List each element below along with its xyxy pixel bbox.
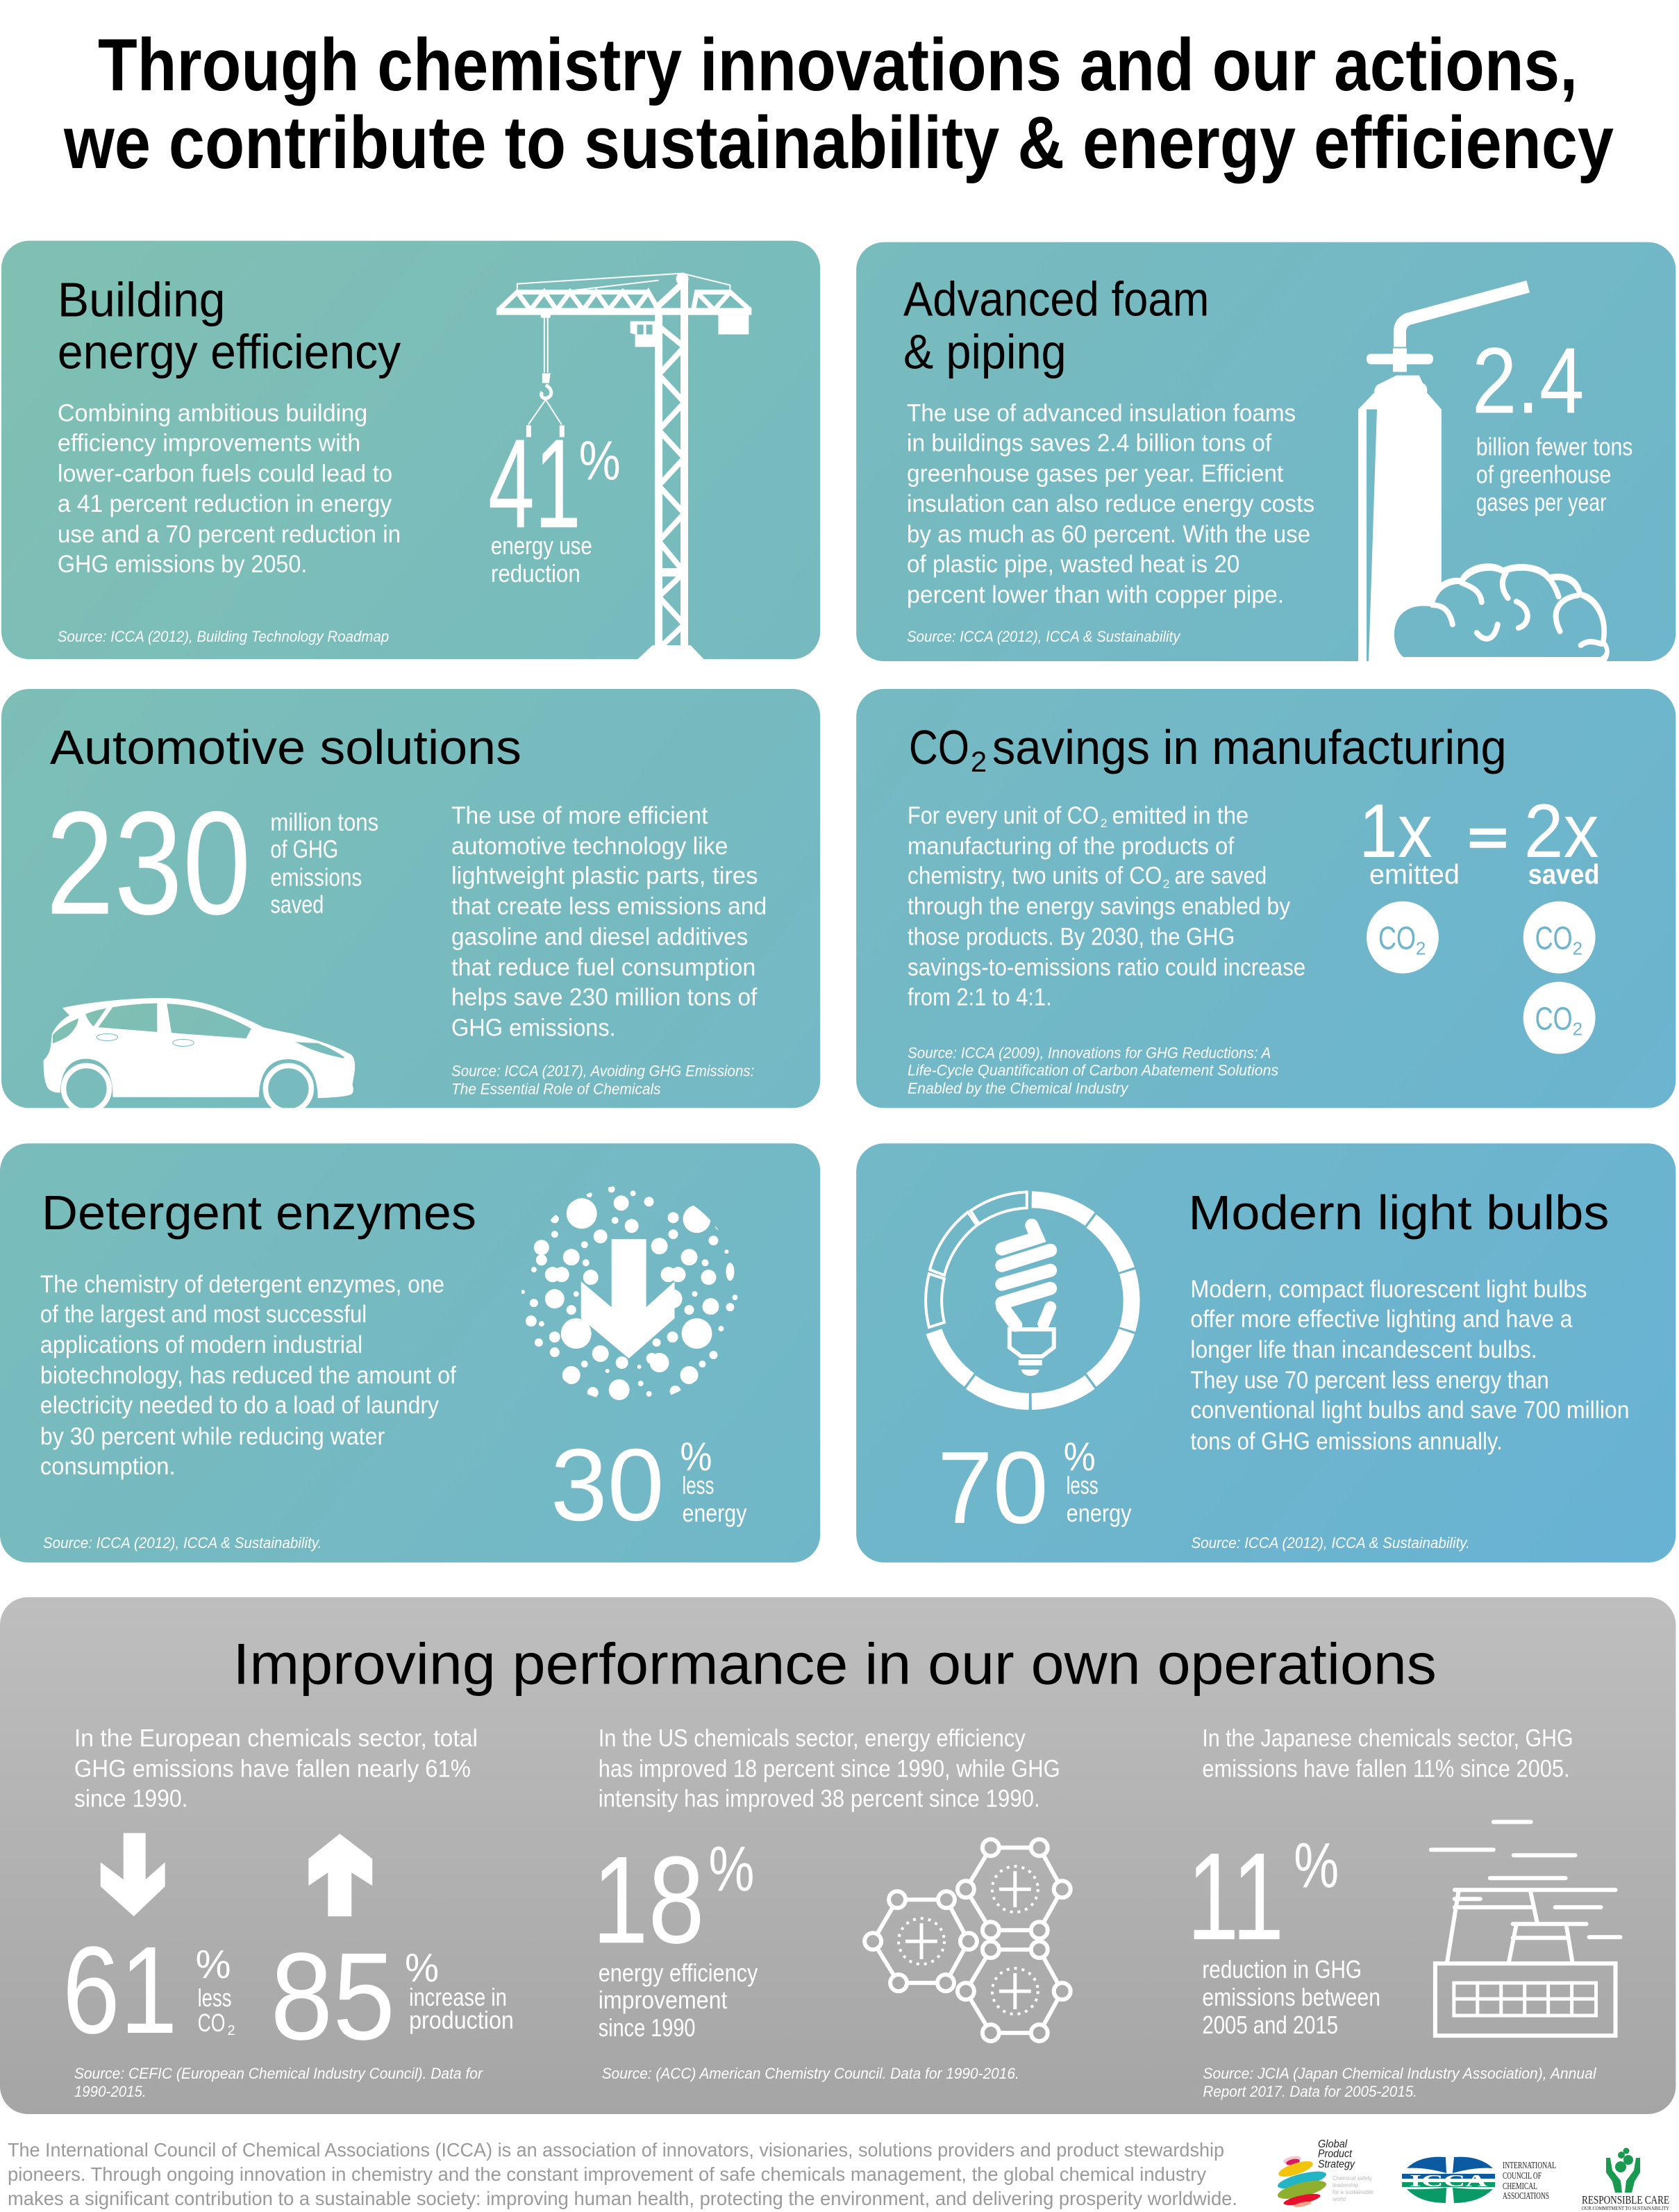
source	[908, 1044, 1278, 1097]
panel: automotive solutions	[1, 689, 820, 1111]
body text: by 30 percent while reducing water	[40, 1423, 385, 1450]
icon: CO2 circle saved 1	[1523, 901, 1596, 974]
stat: 11 percent reduction: %	[1294, 1830, 1339, 1901]
source: JCIA: Source: JCIA (Japan Chemical Industry Association), Annual	[1203, 2065, 1597, 2082]
stat: 70 percent less energy: %	[1064, 1435, 1096, 1479]
source: JCIA: Report 2017. Data for 2005-2015.	[1203, 2083, 1417, 2100]
icon: CO2 circle saved 1: CO	[1535, 920, 1573, 956]
stat: 18 percent energy efficiency: improvement	[599, 1986, 727, 2014]
body text: Modern, compact fluorescent light bulbs	[1190, 1276, 1587, 1303]
text: US sector	[599, 1724, 1060, 1812]
stat: 70 percent less energy: 70	[937, 1431, 1049, 1545]
body text: The use of advanced insulation foams	[907, 399, 1296, 426]
text: European sector	[74, 1724, 478, 1812]
stat: 18 percent energy efficiency: %	[708, 1833, 754, 1904]
equation: 1x emitted equals 2x saved: 2x	[1524, 789, 1599, 874]
body text: through the energy savings enabled by	[908, 893, 1291, 920]
stat: 41 percent: %	[579, 429, 621, 491]
panel: modern light bulbs	[856, 1143, 1676, 1563]
stat: 18 percent energy efficiency: 18	[592, 1830, 704, 1969]
panel: advanced foam and piping	[856, 242, 1676, 666]
stat: 11 percent reduction: 11	[1187, 1827, 1284, 1965]
body text: biotechnology, has reduced the amount of	[40, 1362, 456, 1389]
body text: The use of more efficient	[451, 802, 708, 829]
body text: in buildings saves 2.4 billion tons of	[907, 429, 1272, 456]
body text	[908, 802, 1305, 1011]
body text: electricity needed to do a load of laundry	[40, 1392, 440, 1419]
stat: 2.4 billion: of greenhouse	[1476, 460, 1612, 488]
body text: use and a 70 percent reduction in	[58, 521, 401, 548]
logo: global product strategy: Chemical safety	[1333, 2175, 1372, 2181]
body text: tons of GHG emissions annually.	[1190, 1428, 1503, 1455]
source: The Essential Role of Chemicals	[451, 1080, 661, 1097]
stat: 70 percent less energy: energy	[1067, 1499, 1132, 1527]
body text: by as much as 60 percent. With the use	[907, 521, 1310, 548]
icon: ring gauge seventy percent	[926, 1192, 1132, 1402]
body text: manufacturing of the products of	[908, 833, 1235, 860]
icon: CO2 circle saved 1: 2	[1573, 938, 1582, 959]
stat: 2.4 billion: gases per year	[1476, 488, 1607, 516]
body text: a 41 percent reduction in energy	[58, 490, 392, 517]
heading: building energy efficiency	[58, 273, 401, 379]
source: Source: ICCA (2012), ICCA & Sustainability	[907, 628, 1181, 645]
source: Enabled by the Chemical Industry	[908, 1079, 1129, 1097]
body text: 2	[1162, 877, 1169, 891]
stat: 2.4 billion	[1472, 328, 1632, 516]
heading: improving performance: Improving performance in our own operations	[233, 1631, 1437, 1697]
logo: ICCA	[1402, 2157, 1556, 2203]
heading: automotive solutions: Automotive solutions	[50, 720, 521, 774]
body text	[40, 1271, 456, 1480]
icon: CO2 circle emitted	[1367, 901, 1439, 974]
body text: chemistry, two units of CO	[908, 863, 1162, 890]
panel: building energy efficiency	[1, 241, 820, 659]
body text: from 2:1 to 4:1.	[908, 984, 1052, 1011]
body text: that create less emissions and	[451, 893, 767, 920]
equation: 1x emitted equals 2x saved: emitted	[1369, 860, 1460, 890]
panel: detergent enzymes	[0, 1143, 820, 1563]
icon: molecular hexagons	[864, 1839, 1071, 2041]
source: CEFIC: 1990-2015.	[74, 2083, 147, 2100]
stat: 230 million tons: of GHG	[270, 835, 338, 863]
text: US sector: intensity has improved 38 percent since 1990.	[599, 1785, 1040, 1812]
logo: responsible care: OUR COMMITMENT TO SUSTAINABILITY	[1582, 2206, 1669, 2211]
body text: lower-carbon fuels could lead to	[58, 460, 392, 487]
logo: global product strategy	[1276, 2138, 1373, 2209]
stat: 61 percent less CO2: 61	[62, 1920, 178, 2059]
body text: lightweight plastic parts, tires	[451, 863, 758, 890]
body text	[58, 399, 401, 578]
body text: efficiency improvements with	[58, 429, 360, 456]
stat: 2.4 billion: 2.4	[1472, 328, 1585, 433]
source	[451, 1062, 754, 1097]
heading: CO2 savings in manufacturing: 2	[971, 745, 987, 778]
stat: 85 percent increase in production: %	[405, 1946, 439, 1990]
icon: down arrow	[101, 1833, 165, 1916]
body text: are saved	[1174, 863, 1267, 890]
stat: 230 million tons: million tons	[270, 808, 378, 836]
heading: CO2 savings in manufacturing: CO	[909, 720, 969, 774]
body text: They use 70 percent less energy than	[1190, 1367, 1549, 1394]
icon: compact fluorescent bulb	[1002, 1225, 1054, 1376]
source: Source: ICCA (2017), Avoiding GHG Emissions:	[451, 1062, 754, 1079]
stat: 11 percent reduction: emissions between	[1202, 1983, 1380, 2011]
stat: 85 percent increase in production: increase in	[409, 1983, 507, 2011]
stat: 230 million tons: 230	[46, 781, 251, 945]
icon: car	[44, 998, 355, 1111]
icon: up arrow	[308, 1833, 372, 1916]
body text: The chemistry of detergent enzymes, one	[40, 1271, 444, 1298]
stat: 30 percent less energy	[551, 1428, 746, 1542]
heading: modern light bulbs: Modern light bulbs	[1188, 1186, 1610, 1240]
heading: detergent enzymes: Detergent enzymes	[42, 1186, 476, 1240]
body text: longer life than incandescent bulbs.	[1190, 1336, 1537, 1363]
body text: offer more effective lighting and have a	[1190, 1306, 1573, 1333]
source: Life-Cycle Quantification of Carbon Abatement Solutions	[908, 1061, 1278, 1079]
source: Source: ICCA (2009), Innovations for GHG Reductions: A	[908, 1044, 1271, 1061]
body text: 2	[1101, 816, 1108, 830]
stat: 18 percent energy efficiency: since 1990	[599, 2013, 695, 2042]
equation: 1x emitted equals 2x saved: saved	[1528, 860, 1600, 890]
icon: CO2 circle emitted: CO	[1378, 920, 1416, 956]
text: Japanese sector: In the Japanese chemicals sector, GHG	[1202, 1724, 1573, 1752]
logo: global product strategy: Product	[1318, 2148, 1352, 2160]
body text: greenhouse gases per year. Efficient	[907, 460, 1283, 487]
body text: emitted in the	[1112, 802, 1248, 829]
source: ACC: Source: (ACC) American Chemistry Council. Data for 1990-2016.	[602, 2065, 1019, 2082]
body text: GHG emissions by 2050.	[58, 551, 307, 578]
equation: 1x emitted equals 2x saved: 1x	[1359, 789, 1432, 874]
source: Source: ICCA (2012), ICCA & Sustainability.	[43, 1534, 321, 1552]
stat: 30 percent less energy: 30	[551, 1428, 665, 1542]
body text: consumption.	[40, 1453, 176, 1480]
panel: CO2 savings in manufacturing	[856, 689, 1676, 1108]
text: US sector: has improved 18 percent since 1990, while GHG	[599, 1755, 1060, 1782]
body text	[907, 399, 1314, 608]
body text: automotive technology like	[451, 833, 728, 860]
stat: 85 percent increase in production: 85	[270, 1927, 395, 2065]
text: Japanese sector: emissions have fallen 11% since 2005.	[1202, 1755, 1570, 1782]
logo: ICCA: CHEMICAL	[1503, 2181, 1537, 2192]
source: JCIA	[1203, 2065, 1597, 2100]
logo: ICCA: INTERNATIONAL	[1503, 2161, 1556, 2171]
logo: ICCA: ICCA	[1410, 2172, 1488, 2190]
footer text	[8, 2139, 1237, 2209]
icon: CO2 circle saved 2	[1523, 982, 1596, 1054]
source: CEFIC: Source: CEFIC (European Chemical Industry Council). Data for	[74, 2065, 484, 2082]
body text: conventional light bulbs and save 700 million	[1190, 1397, 1629, 1424]
icon: spray foam can and cloud	[1358, 287, 1610, 666]
stat: 61 percent less CO2: 2	[228, 2023, 235, 2038]
body text: insulation can also reduce energy costs	[907, 490, 1314, 517]
text: US sector: In the US chemicals sector, energy efficiency	[599, 1724, 1026, 1752]
body text: gasoline and diesel additives	[451, 924, 748, 951]
body text: those products. By 2030, the GHG	[908, 924, 1235, 951]
equation: 1x emitted equals 2x saved	[1359, 789, 1600, 890]
heading: CO2 savings in manufacturing: savings in manufacturing	[992, 720, 1507, 774]
heading: building energy efficiency: energy efficiency	[58, 324, 401, 379]
body text: of plastic pipe, wasted heat is 20	[907, 551, 1239, 578]
stat: 61 percent less CO2: %	[196, 1943, 231, 1987]
logo: global product strategy: Strategy	[1318, 2159, 1355, 2170]
stat: 11 percent reduction: reduction in GHG	[1202, 1955, 1362, 1984]
icon: tower crane	[496, 273, 751, 659]
stat: 230 million tons: emissions	[270, 863, 362, 892]
stat: 30 percent less energy: less	[683, 1471, 714, 1499]
stat: 41 percent: energy use	[491, 531, 592, 560]
footer text: The International Council of Chemical Associations (ICCA) is an association of innovators, visionaries, solutions providers and product stewardship	[8, 2139, 1224, 2161]
stat: 85 percent increase in production: production	[409, 2006, 514, 2034]
stat: 41 percent: 41	[488, 413, 581, 554]
body text: of the largest and most successful	[40, 1301, 367, 1328]
stat: 85 percent increase in production	[270, 1927, 514, 2065]
stat: 2.4 billion: billion fewer tons	[1476, 432, 1632, 460]
icon: CO2 circle saved 2: 2	[1573, 1019, 1582, 1040]
body text: helps save 230 million tons of	[451, 984, 758, 1011]
body text: applications of modern industrial	[40, 1331, 362, 1358]
stat: 11 percent reduction	[1187, 1827, 1380, 2039]
body text	[451, 802, 767, 1042]
panel: improving performance in our own operations	[0, 1597, 1676, 2114]
body text: that reduce fuel consumption	[451, 954, 755, 981]
stat: 70 percent less energy	[937, 1431, 1132, 1545]
body text: For every unit of CO	[908, 802, 1099, 829]
icon: factory with smoke	[1431, 1822, 1620, 2036]
source: Source: ICCA (2012), ICCA & Sustainability.	[1191, 1534, 1470, 1552]
source: CEFIC	[74, 2065, 484, 2100]
text: European sector: since 1990.	[74, 1785, 188, 1812]
stat: 230 million tons: saved	[270, 890, 324, 919]
text: European sector: In the European chemicals sector, total	[74, 1724, 478, 1752]
heading: advanced foam and piping: Advanced foam	[903, 272, 1209, 326]
logo: ICCA: ASSOCIATIONS	[1503, 2191, 1549, 2202]
logo: global product strategy: Global	[1318, 2138, 1347, 2150]
icon: CO2 circle saved 2: CO	[1535, 1001, 1573, 1037]
body text	[1190, 1276, 1629, 1455]
logo: ICCA: COUNCIL OF	[1503, 2171, 1542, 2181]
title	[63, 23, 1614, 184]
stat: 70 percent less energy: less	[1067, 1471, 1099, 1499]
stat: 30 percent less energy: %	[680, 1435, 712, 1479]
footer text: makes a significant contribution to a sustainable society: improving human health, protecting the environment, and delivering prosperity worldwide.	[8, 2188, 1237, 2209]
stat: 30 percent less energy: energy	[683, 1499, 746, 1527]
text: European sector: GHG emissions have fallen nearly 61%	[74, 1755, 471, 1782]
icon: CO2 circle emitted: 2	[1416, 938, 1426, 959]
heading: advanced foam and piping: & piping	[903, 324, 1067, 379]
footer text: pioneers. Through ongoing innovation in chemistry and the constant improvement of safe chemicals management, the global chemical industry	[8, 2163, 1206, 2185]
heading: advanced foam and piping	[903, 272, 1209, 379]
body text: percent lower than with copper pipe.	[907, 581, 1284, 608]
source: Source: ICCA (2012), Building Technology Roadmap	[58, 628, 389, 645]
body text: GHG emissions.	[451, 1014, 616, 1042]
body text: Combining ambitious building	[58, 399, 367, 426]
body text: savings-to-emissions ratio could increase	[908, 954, 1305, 981]
logo: global product strategy: leadership	[1333, 2182, 1358, 2188]
stat: 11 percent reduction: 2005 and 2015	[1202, 2011, 1338, 2039]
stat: 61 percent less CO2: less	[198, 1984, 231, 2012]
logo: global product strategy: world	[1332, 2196, 1346, 2202]
stat: 41 percent: reduction	[491, 559, 580, 588]
stat: 18 percent energy efficiency	[592, 1830, 758, 2042]
logo: global product strategy: for a sustainable	[1333, 2189, 1373, 2195]
logo: responsible care	[1582, 2147, 1669, 2211]
heading: building energy efficiency: Building	[58, 273, 226, 327]
text: Japanese sector	[1202, 1724, 1573, 1782]
icon: bubbles with down arrow	[521, 1186, 737, 1400]
stat: 18 percent energy efficiency: energy efficiency	[599, 1959, 758, 1987]
stat: 61 percent less CO2: CO	[198, 2009, 226, 2037]
